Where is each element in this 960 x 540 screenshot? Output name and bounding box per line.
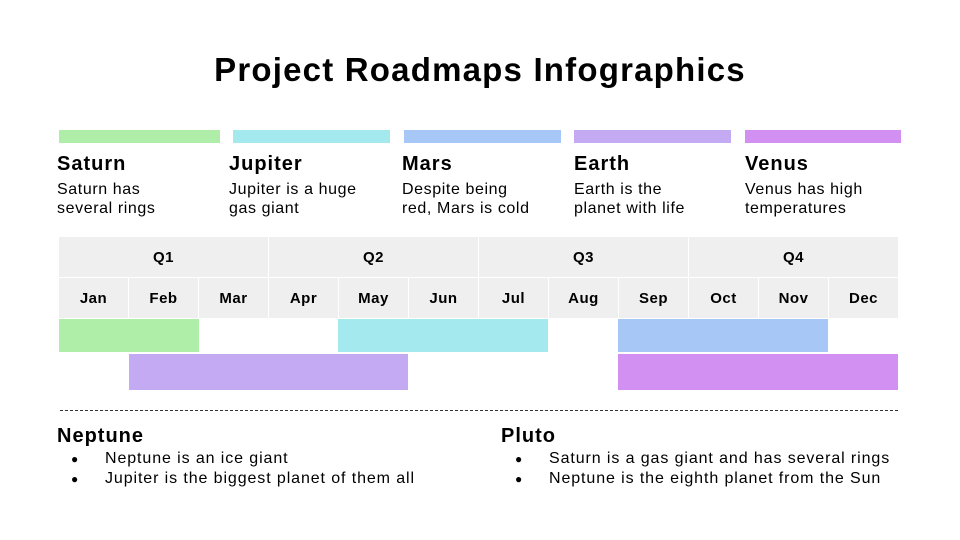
phase: Jupiter: gas giant [229,200,299,217]
phase: Jupiter [229,130,390,217]
phase: Jupiter: Jupiter [229,153,303,175]
quarter headers: Q2 [363,248,384,266]
phase: Venus: Venus [745,153,809,175]
phase: Mars: red, Mars is cold [402,200,530,217]
quarter headers: Q3 [573,248,594,266]
month headers: Oct [710,290,737,306]
bar: Earth [129,354,408,390]
gantt chart [59,237,898,390]
phase: Mars: Despite being [402,181,508,198]
month headers: Jul [502,290,525,306]
panel: Pluto: Neptune is the eighth planet from the Sun [549,470,881,487]
panel: Pluto [501,425,890,487]
phase: Saturn: Saturn [57,153,126,175]
phase: Earth: planet with life [574,200,685,217]
month headers: Aug [568,290,599,306]
panel: Pluto: Pluto [501,425,556,447]
phase: Earth: Earth [574,153,630,175]
bar: Jupiter [338,319,548,352]
phase: Earth [574,130,731,217]
month headers: Mar [219,290,248,306]
phase: Saturn: Saturn has [57,181,140,198]
quarter headers: Q4 [783,248,804,266]
phase: Earth: Earth is the [574,181,662,198]
bar: Saturn [59,319,199,352]
phase: Mars [402,130,561,217]
month headers [59,278,898,318]
panel: Neptune [57,425,415,487]
panel: Neptune: Neptune [57,425,144,447]
phase: Venus: temperatures [745,200,846,217]
panel: Neptune: Jupiter is the biggest planet of them all [105,470,415,487]
phase: Mars: Mars [402,153,453,175]
panel: phases [57,130,901,217]
month headers: Feb [149,290,178,306]
phase: Saturn [57,130,220,217]
month headers: Sep [639,290,668,306]
quarter headers [59,237,898,277]
panel: Neptune: Neptune is an ice giant [105,450,288,467]
month headers: Apr [290,290,317,306]
month headers: Jan [80,290,107,306]
month headers: May [358,290,389,306]
phase: Venus [745,130,901,217]
month headers: Nov [779,290,808,306]
title: Project Roadmaps Infographics [214,51,746,88]
phase: Jupiter: Jupiter is a huge [229,181,357,198]
phase: Saturn: several rings [57,200,156,217]
quarter headers: Q1 [153,248,174,266]
bar: Mars [618,319,828,352]
bar: Venus [618,354,898,390]
month headers: Dec [849,290,878,306]
phase: Venus: Venus has high [745,181,863,198]
panel: Pluto: Saturn is a gas giant and has several rings [549,450,890,467]
month headers: Jun [429,290,458,306]
